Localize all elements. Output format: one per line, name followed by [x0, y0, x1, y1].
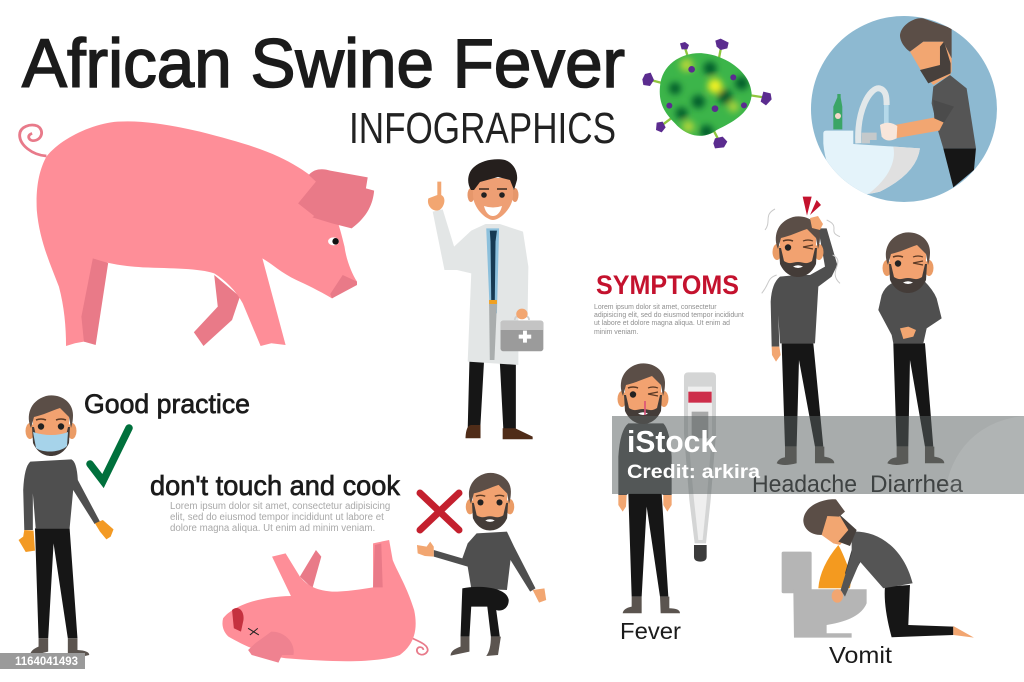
dead pig snout [232, 608, 244, 632]
man trousers [885, 585, 953, 637]
doctor head [468, 159, 518, 220]
diarrhea legs [887, 343, 944, 465]
figure: fever man [618, 363, 680, 613]
pig far hind leg [81, 258, 108, 345]
headache hand [810, 216, 823, 230]
pig eye [328, 237, 339, 245]
watermark brand: iStock [627, 424, 718, 459]
faucet lever [862, 133, 877, 143]
man foot [953, 626, 974, 638]
diarrhea upper body [878, 280, 942, 343]
headache upper body [762, 197, 840, 362]
id number: 1164041493 [15, 656, 78, 668]
thermometer display [692, 412, 708, 438]
pig ear [298, 169, 374, 228]
man beard [920, 42, 951, 83]
illustration: doctor with medical case [428, 159, 543, 439]
man pants [943, 148, 976, 187]
man hand [832, 589, 843, 603]
icon: green check mark [90, 428, 129, 481]
illustration: man washing hands [811, 16, 997, 202]
pig tail [20, 125, 46, 156]
labels: diarrhea: Diarrhea [870, 471, 964, 498]
doctor trousers gap [489, 304, 497, 360]
man sweater [841, 532, 913, 597]
figure: diarrhea man [878, 232, 944, 465]
figure: man with mask and gloves [19, 395, 114, 657]
masked man head [26, 395, 76, 456]
watermark band [612, 416, 1024, 494]
text block: handling description: elit, sed do eiusmod tempor incididunt ut labore et [170, 512, 384, 523]
icon: red cross [420, 493, 459, 530]
thermometer case [684, 372, 716, 543]
illustration: dead pig [222, 540, 428, 663]
doctor belt [489, 300, 497, 304]
dead pig leg shade [373, 543, 383, 587]
headache legs [777, 343, 834, 465]
figure: headache man [762, 197, 840, 465]
watermark credit: Credit: arkira [627, 462, 760, 483]
figure: man warning, seated on knee [417, 473, 546, 656]
labels: headache: Headache [752, 471, 857, 498]
labels: fever: Fever [620, 618, 681, 644]
bottle label [835, 113, 841, 119]
doctor medical case [501, 309, 543, 351]
heading: good practice: Good practice [84, 389, 250, 419]
band background [612, 416, 1024, 494]
warning man head [466, 473, 514, 530]
section heading: symptoms: SYMPTOMS [596, 270, 739, 300]
illustration: virus [642, 39, 772, 148]
text block: symptoms description: Lorem ipsum dolor sit amet, consectetur [594, 304, 717, 311]
text block: handling description: Lorem ipsum dolor sit amet, consectetur adipisicing [170, 501, 390, 512]
title: African Swine Fever [22, 25, 625, 102]
virus spikes [648, 44, 766, 143]
text block: symptoms description: ut labore et dolore magna aliqua. Ut enim ad [594, 320, 730, 327]
man face [822, 515, 852, 545]
dead pig dark leg [300, 550, 321, 588]
fever head [618, 363, 668, 424]
thermometer tip [694, 545, 707, 562]
wash circle background [811, 16, 997, 202]
image id tag [0, 653, 85, 669]
text block: symptoms description: minim veniam. [594, 329, 639, 336]
man hair [900, 18, 952, 58]
id background [0, 653, 85, 669]
man beard [838, 513, 857, 546]
virus body [660, 53, 752, 136]
thermometer glass [688, 387, 712, 540]
toilet tank [782, 552, 812, 593]
doctor shirt [486, 228, 499, 313]
sink shade [868, 147, 920, 194]
man hair [803, 499, 845, 535]
doctor raised hand [428, 182, 444, 211]
faucet [858, 88, 887, 143]
surgical mask [33, 432, 68, 452]
figure: vomiting man at toilet [782, 499, 974, 638]
illustration: pink pig standing [20, 121, 374, 346]
text block: handling description: dolore magna aliqua. Ut enim ad minim veniam. [170, 523, 375, 534]
dead pig ear [248, 632, 294, 663]
man arm [895, 117, 944, 138]
sink [823, 131, 920, 194]
heading: don't touch and cook: don't touch and cook [150, 470, 401, 501]
fever body [618, 423, 680, 613]
thermometer reading [688, 392, 712, 403]
masked man body [19, 459, 114, 657]
labels: vomit: Vomit [829, 642, 893, 668]
icon: thermometer [684, 372, 716, 562]
band faint shape [945, 416, 1024, 494]
man face [910, 42, 952, 85]
subtitle: INFOGRAPHICS [349, 104, 616, 153]
virus spots [669, 58, 748, 138]
dead pig body [222, 540, 416, 661]
diarrhea head [882, 232, 934, 293]
doctor legs [468, 360, 516, 430]
headache head [772, 216, 824, 277]
doctor white coat [433, 209, 528, 365]
dead pig tail [412, 638, 428, 655]
text block: symptoms description: adipisicing elit, sed do eiusmod tempor incididunt [594, 312, 744, 319]
toilet bowl [793, 589, 867, 638]
pig body [37, 121, 357, 346]
doctor tie [490, 231, 497, 300]
warning man body [417, 532, 546, 656]
doctor body [428, 182, 543, 439]
man sleeve [933, 100, 954, 123]
man back arm [845, 550, 862, 580]
dead pig eye [248, 628, 259, 635]
pig far front leg [194, 275, 240, 346]
vomit [818, 545, 852, 588]
pig snout [330, 275, 357, 298]
doctor shoes [466, 425, 533, 439]
foam hands [880, 123, 897, 140]
washing scene contents [823, 18, 976, 194]
virus spike heads [642, 39, 772, 148]
man shirt [932, 75, 976, 148]
soap bottle [833, 94, 842, 129]
water [884, 105, 889, 125]
